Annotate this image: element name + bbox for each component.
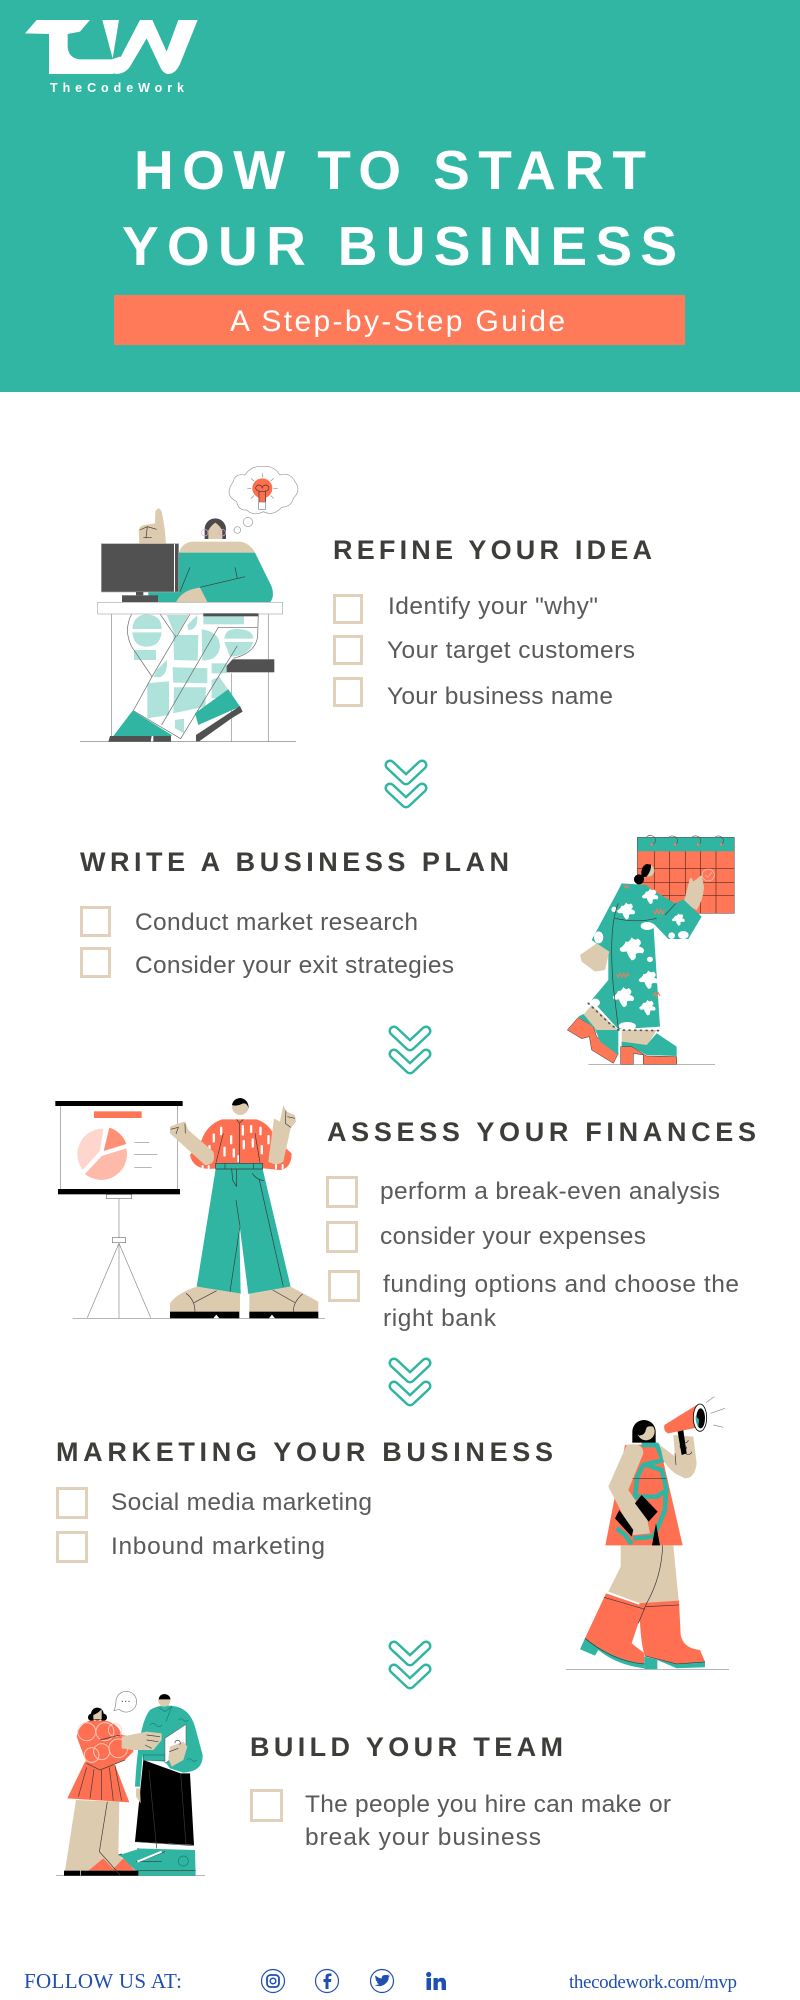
megaphone <box>664 1397 725 1455</box>
section: assess your finances: consider your expenses <box>380 1223 646 1250</box>
section: assess your finances: ASSESS YOUR FINANCES <box>327 1117 756 1147</box>
section: build your team: BUILD YOUR TEAM <box>250 1732 563 1762</box>
section: write a business plan: WRITE A BUSINESS PLAN <box>80 847 509 877</box>
footer <box>24 1969 737 1993</box>
arrow: chevron down 2 <box>394 1031 426 1069</box>
header panel <box>0 0 800 392</box>
section: assess your finances: funding options and choose the <box>383 1271 739 1298</box>
section: marketing your business <box>56 1437 553 1562</box>
title: HOW TO START <box>134 139 646 201</box>
section: marketing your business: MARKETING YOUR BUSINESS <box>56 1437 553 1467</box>
pie chart <box>77 1128 157 1180</box>
illustration: presenter with pie chart screen <box>55 1098 325 1318</box>
arrow: chevron down 4 <box>394 1646 426 1684</box>
calendar <box>637 836 734 913</box>
icon: instagram <box>262 1970 284 1992</box>
illustration: person marking a calendar <box>567 836 734 1064</box>
section: refine your idea: REFINE YOUR IDEA <box>333 535 652 565</box>
illustration: person at desk with idea <box>80 466 298 742</box>
section: marketing your business: Social media marketing <box>111 1489 372 1516</box>
section: build your team: break your business <box>305 1824 541 1851</box>
icon: facebook <box>316 1970 338 1992</box>
section: write a business plan: Conduct market research <box>135 909 418 936</box>
section: write a business plan <box>80 847 509 979</box>
title <box>122 139 677 277</box>
section: build your team: The people you hire can make or <box>305 1791 671 1818</box>
section: build your team <box>250 1732 671 1851</box>
logo: TheCodeWork <box>50 81 184 95</box>
illustration: person with megaphone <box>566 1397 729 1669</box>
section: refine your idea <box>333 535 652 710</box>
section: write a business plan: Consider your exit strategies <box>135 952 454 979</box>
illustration: two team members talking <box>56 1691 205 1876</box>
icon: twitter <box>370 1970 394 1992</box>
arrow: chevron down 1 <box>390 765 422 803</box>
section: refine your idea: Your target customers <box>387 637 635 664</box>
section: refine your idea: Your business name <box>387 683 613 710</box>
section: refine your idea: Identify your "why" <box>388 593 598 620</box>
icon: linkedin <box>426 1972 446 1990</box>
arrow: chevron down 3 <box>394 1363 426 1401</box>
section: assess your finances: right bank <box>383 1305 497 1332</box>
title: YOUR BUSINESS <box>122 215 677 277</box>
section: assess your finances <box>327 1117 756 1332</box>
speech bubble <box>114 1691 137 1712</box>
section: marketing your business: Inbound marketing <box>111 1533 325 1560</box>
logo <box>25 20 198 95</box>
subtitle banner <box>114 295 685 345</box>
section: assess your finances: perform a break-even analysis <box>380 1178 720 1205</box>
icon: light bulb <box>247 473 278 509</box>
subtitle banner: A Step-by-Step Guide <box>230 305 565 338</box>
footer: thecodework.com/mvp <box>569 1972 737 1993</box>
footer: FOLLOW US AT: <box>24 1969 182 1993</box>
